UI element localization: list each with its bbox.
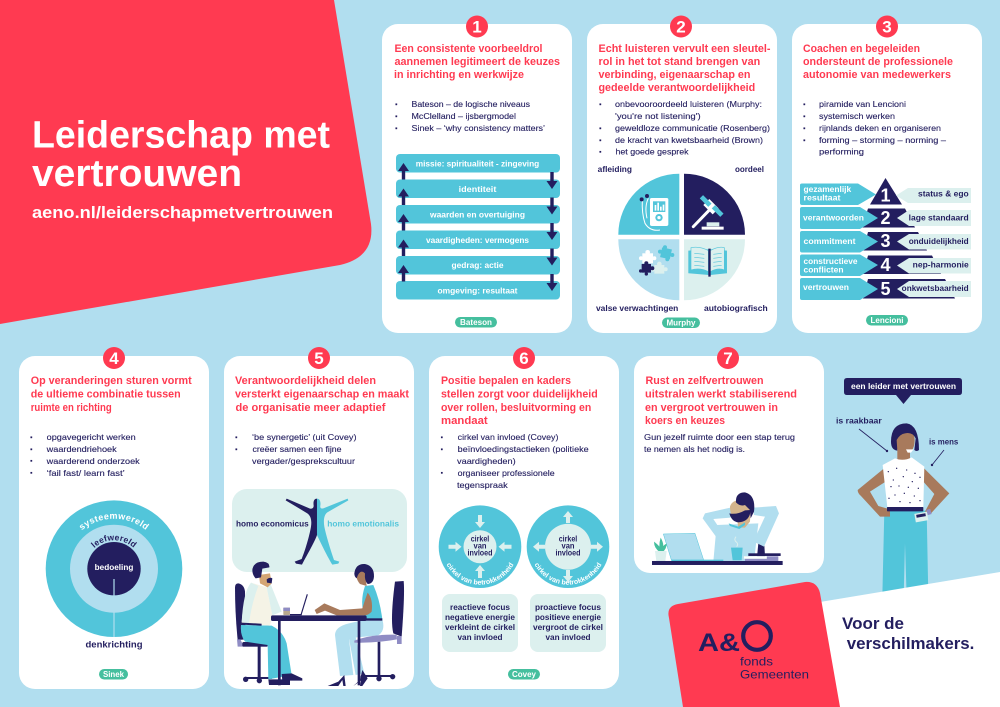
bullet list 1: Sinek – ‘why consistency matters’ — [412, 124, 545, 133]
golden circle diagram: denkrichting — [86, 640, 143, 651]
bullet list 3: systemisch werken — [819, 112, 895, 121]
icon: gavel — [693, 195, 724, 230]
badge 3 — [876, 16, 898, 38]
panel 7: rust en zelfvertrouwen — [634, 347, 824, 573]
heading: main title — [32, 115, 330, 195]
bullet list 6: vaardigheden) — [457, 457, 516, 466]
bullet list 6: beïnvloedingstactieken (politieke — [458, 445, 589, 454]
url text: aeno.nl/leiderschapmetvertrouwen — [32, 204, 333, 222]
woman — [315, 564, 397, 686]
man — [241, 562, 302, 685]
reactive focus box — [442, 594, 518, 652]
logo: A&O fonds Gemeenten: A& — [698, 629, 740, 657]
reactive focus box: negatieve energie — [445, 613, 515, 622]
arms — [858, 468, 890, 517]
panel 3: coachen — [792, 16, 982, 333]
logical levels diagram: waarden en overtuiging — [429, 210, 525, 220]
proactive focus box: positieve energie — [535, 613, 601, 622]
heading 2: rol in het tot stand brengen van — [598, 56, 760, 68]
heading 5: versterkt eigenaarschap en maakt — [235, 388, 409, 400]
right chair — [361, 581, 404, 681]
proactive focus circle — [526, 505, 610, 588]
table — [271, 615, 367, 685]
mug — [731, 548, 743, 560]
badge 1 — [466, 16, 488, 38]
badge 7: 7 — [723, 349, 733, 368]
bullet list 1: Bateson – de logische niveaus — [412, 100, 530, 109]
logo panel — [668, 582, 840, 707]
Lencioni pyramid: gezamenlijk — [804, 185, 852, 194]
heading: main title: Leiderschap met — [32, 115, 330, 157]
bullet list 2: geweldloze communicatie (Rosenberg) — [615, 124, 770, 133]
heading 3: ondersteunt de professionele — [803, 56, 953, 68]
source tag: Murphy — [662, 318, 700, 328]
source tag: Sinek — [99, 669, 128, 680]
heading 6 — [441, 375, 598, 427]
quadrant labels: valse verwachtingen — [596, 304, 678, 313]
heading 6: over rollen, besluitvorming en — [441, 402, 591, 414]
Lencioni pyramid: 1 — [880, 186, 891, 206]
heading 2: gedeelde verantwoordelijkheid — [598, 82, 755, 94]
heading 2: verbinding, eigenaarschap en — [598, 69, 750, 81]
homo economicus and emotionalis panel — [232, 489, 407, 572]
logo: A&O fonds Gemeenten: fonds — [740, 654, 773, 668]
heading 3: autonomie van medewerkers — [803, 69, 951, 81]
Lencioni pyramid: onkwetsbaarheid — [902, 284, 969, 293]
homo economicus and emotionalis panel: homo economicus — [236, 520, 309, 529]
badge 1: 1 — [472, 18, 482, 36]
logical levels diagram: gedrag: actie — [452, 261, 504, 270]
badge 4 — [103, 347, 125, 369]
bullet list 5: ‘be synergetic’ (uit Covey) — [252, 433, 357, 442]
bullet list 3: rijnlands deken en organiseren — [819, 124, 941, 133]
reactive focus circle: cirkel — [471, 534, 489, 544]
bullet list 2: 'you're not listening') — [615, 112, 701, 121]
source tag: Bateson — [455, 317, 497, 328]
reactive focus circle: van — [474, 542, 486, 550]
badge 7 — [717, 347, 739, 369]
Lencioni pyramid: verantwoorden — [803, 214, 864, 223]
illustration: woman leader — [858, 423, 949, 597]
proactive focus circle: cirkel van betrokkenheid — [535, 562, 602, 585]
bullet list 2: het goede gesprek — [616, 148, 689, 156]
quadrant labels: afleiding — [598, 165, 632, 174]
source tag: Covey — [508, 669, 540, 680]
badge 4: 4 — [109, 349, 119, 368]
speech bubble — [844, 378, 962, 404]
badge 5: 5 — [314, 349, 324, 368]
heading 1 — [394, 43, 560, 81]
callout: is raakbaar: is raakbaar — [836, 416, 883, 426]
plant — [654, 538, 667, 552]
homo economicus and emotionalis panel: homo emotionalis — [327, 520, 399, 529]
listening pie chart — [618, 174, 745, 300]
panel 4: veranderingen — [19, 347, 209, 689]
white footer area — [820, 572, 1000, 707]
heading 5 — [235, 375, 409, 414]
body text 7: te nemen als het nodig is. — [644, 445, 745, 454]
heading 1: aannemen legitimeert de keuzes — [394, 56, 560, 68]
bullet list 6: organiseer professionele — [458, 469, 555, 478]
bullet list 6 — [441, 433, 589, 490]
books — [745, 556, 778, 561]
reactive focus circle — [438, 505, 522, 588]
badge 3: 3 — [882, 18, 892, 36]
proactive focus box: van invloed — [546, 633, 590, 642]
Lencioni pyramid: 4 — [880, 255, 891, 275]
badge 6: 6 — [519, 349, 529, 368]
reactive focus circle: invloed — [468, 548, 492, 558]
logo: A&O fonds Gemeenten: Gemeenten — [740, 668, 809, 682]
Lencioni pyramid: 5 — [880, 279, 891, 299]
heading 6: mandaat — [441, 415, 488, 427]
golden circle diagram: leefwereld — [90, 535, 137, 548]
heading 7: uitstralen werkt stabiliserend — [645, 388, 797, 400]
bullet list 4: opgavegericht werken — [47, 433, 136, 442]
logo: A&O fonds Gemeenten — [698, 622, 809, 682]
panel 5: verantwoordelijkheid — [224, 347, 414, 689]
heading 1: Een consistente voorbeeldrol — [394, 43, 542, 55]
icon: open book — [688, 247, 727, 277]
bullet list 3: performing — [819, 148, 865, 156]
Lencioni pyramid: lage standaard — [909, 214, 969, 223]
pants — [882, 511, 928, 597]
tagline: verschilmakers. — [847, 634, 974, 653]
bullet list 1: McClelland – ijsbergmodel — [412, 112, 516, 121]
golden circle diagram — [46, 500, 182, 651]
reactive focus box: verkleint de cirkel — [445, 623, 515, 632]
belt — [887, 507, 923, 511]
Lencioni pyramid: status & ego — [918, 190, 969, 199]
bullet list 5: creëer samen een fijne — [252, 445, 342, 454]
Lencioni pyramid: conflicten — [804, 266, 844, 274]
quadrant labels: autobiografisch — [704, 304, 768, 313]
bullet list 4 — [30, 433, 141, 478]
panel 1: voorbeeldrol — [382, 16, 572, 333]
quadrant labels: oordeel — [735, 165, 764, 174]
Lencioni pyramid: nep-harmonie — [913, 261, 969, 270]
heading 7: en vergroot vertrouwen in — [645, 402, 778, 414]
Lencioni pyramid — [800, 178, 971, 300]
heading 5: de organisatie meer adaptief — [236, 402, 386, 414]
proactive focus box: proactieve focus — [535, 603, 601, 612]
callout: is mens — [929, 438, 959, 466]
golden circle diagram: systeemwereld — [80, 514, 150, 530]
heading 1: in inrichting en werkwijze — [394, 69, 524, 81]
bullet list 6: tegenspraak — [457, 481, 509, 490]
bullet list 3: forming – storming – norming – — [819, 136, 946, 145]
heading 7 — [645, 375, 797, 427]
badge 2 — [670, 16, 692, 38]
bullet list 4: ‘fail fast/ learn fast’ — [47, 469, 125, 478]
source tag: Covey: Covey — [512, 670, 536, 679]
callout: is mens: is mens — [929, 438, 959, 446]
proactive focus circle: invloed — [556, 548, 580, 558]
illustration: two people at a table — [235, 562, 404, 686]
proactive focus box: vergroot de cirkel — [533, 623, 603, 632]
bullet list 2: onbevooroordeeld luisteren (Murphy: — [615, 100, 762, 109]
cup and laptop — [283, 594, 307, 615]
illustration: relaxed man at desk — [652, 492, 783, 565]
bullet list 4: waarderend onderzoek — [46, 457, 141, 466]
proactive focus box — [530, 594, 606, 652]
badge and bracelet — [914, 509, 932, 522]
red title panel — [0, 0, 371, 324]
heading 3 — [803, 43, 953, 81]
heading 2 — [598, 43, 771, 94]
heading 4 — [31, 375, 192, 414]
heading 3: Coachen en begeleiden — [803, 43, 920, 55]
heading 7: koers en keuzes — [645, 415, 725, 427]
proactive focus circle: cirkel — [559, 534, 577, 544]
Lencioni pyramid: vertrouwen — [803, 283, 849, 292]
blouse — [883, 457, 924, 507]
icon: two-tone figure — [286, 499, 348, 565]
heading 4: Op veranderingen sturen vormt — [31, 375, 192, 387]
left chair — [235, 583, 272, 683]
badge 5 — [308, 347, 330, 369]
callout: is raakbaar — [836, 416, 888, 452]
heading: main title: vertrouwen — [32, 153, 242, 195]
heading 5: Verantwoordelijkheid delen — [235, 375, 376, 387]
speech bubble: een leider met vertrouwen — [851, 382, 956, 391]
Lencioni pyramid: commitment — [804, 237, 856, 246]
Lencioni pyramid: constructieve — [804, 257, 858, 266]
laptop — [663, 533, 704, 561]
source tag: Murphy: Murphy — [666, 318, 696, 328]
reactive focus circle: cirkel van betrokkenheid — [447, 562, 514, 585]
logical levels diagram: vaardigheden: vermogens — [426, 236, 529, 245]
bullet list 5 — [236, 433, 357, 466]
source tag: Lencioni — [866, 315, 908, 326]
source tag: Bateson: Bateson — [460, 318, 492, 327]
Lencioni pyramid: resultaat — [804, 194, 841, 203]
icon: puzzle pieces — [639, 245, 674, 276]
heading 6: stellen zorgt voor duidelijkheid — [441, 388, 598, 400]
head — [891, 423, 919, 461]
golden circle diagram: bedoeling — [95, 563, 133, 572]
heading 2: Echt luisteren vervult een sleutel- — [598, 43, 771, 55]
quadrant labels — [596, 165, 768, 313]
bullet list 4: waardendriehoek — [46, 445, 118, 454]
badge 2: 2 — [676, 18, 686, 36]
bullet list 3: piramide van Lencioni — [819, 100, 906, 109]
logical levels diagram: omgeving: resultaat — [438, 286, 518, 296]
reactive focus box: van invloed — [458, 633, 502, 642]
bullet list 6: cirkel van invloed (Covey) — [458, 433, 559, 442]
bullet list 5: vergader/gesprekscultuur — [252, 457, 355, 466]
source tag: Sinek: Sinek — [103, 670, 124, 679]
proactive focus circle: van — [562, 542, 574, 550]
heading 4: de ultieme combinatie tussen — [31, 388, 181, 400]
bullet list 3 — [804, 100, 946, 156]
heading 4: ruimte en richting — [31, 402, 112, 414]
logical levels diagram: missie: spiritualiteit - zingeving — [416, 160, 539, 168]
heading 7: Rust en zelfvertrouwen — [646, 375, 764, 387]
heading 6: Positie bepalen en kaders — [441, 375, 571, 387]
logical levels diagram: identiteit — [459, 185, 497, 194]
panel 6: positie bepalen — [429, 347, 619, 689]
logical levels diagram — [396, 154, 560, 300]
source tag: Lencioni: Lencioni — [870, 316, 904, 325]
badge 6 — [513, 347, 535, 369]
icon: music player — [640, 194, 668, 230]
Lencioni pyramid: onduidelijkheid — [909, 237, 969, 246]
reactive focus box: reactieve focus — [450, 603, 510, 612]
Lencioni pyramid: 3 — [880, 231, 891, 251]
tagline — [842, 614, 974, 653]
Lencioni pyramid: 2 — [880, 208, 891, 228]
body text 7: Gun jezelf ruimte door een stap terug — [644, 433, 795, 442]
bullet list 2: de kracht van kwetsbaarheid (Brown) — [615, 136, 763, 145]
bullet list 1 — [396, 100, 545, 133]
panel 2: luisteren — [587, 16, 777, 333]
bullet list 2 — [600, 100, 770, 156]
body text 7 — [644, 433, 795, 454]
tagline: Voor de — [842, 614, 904, 633]
